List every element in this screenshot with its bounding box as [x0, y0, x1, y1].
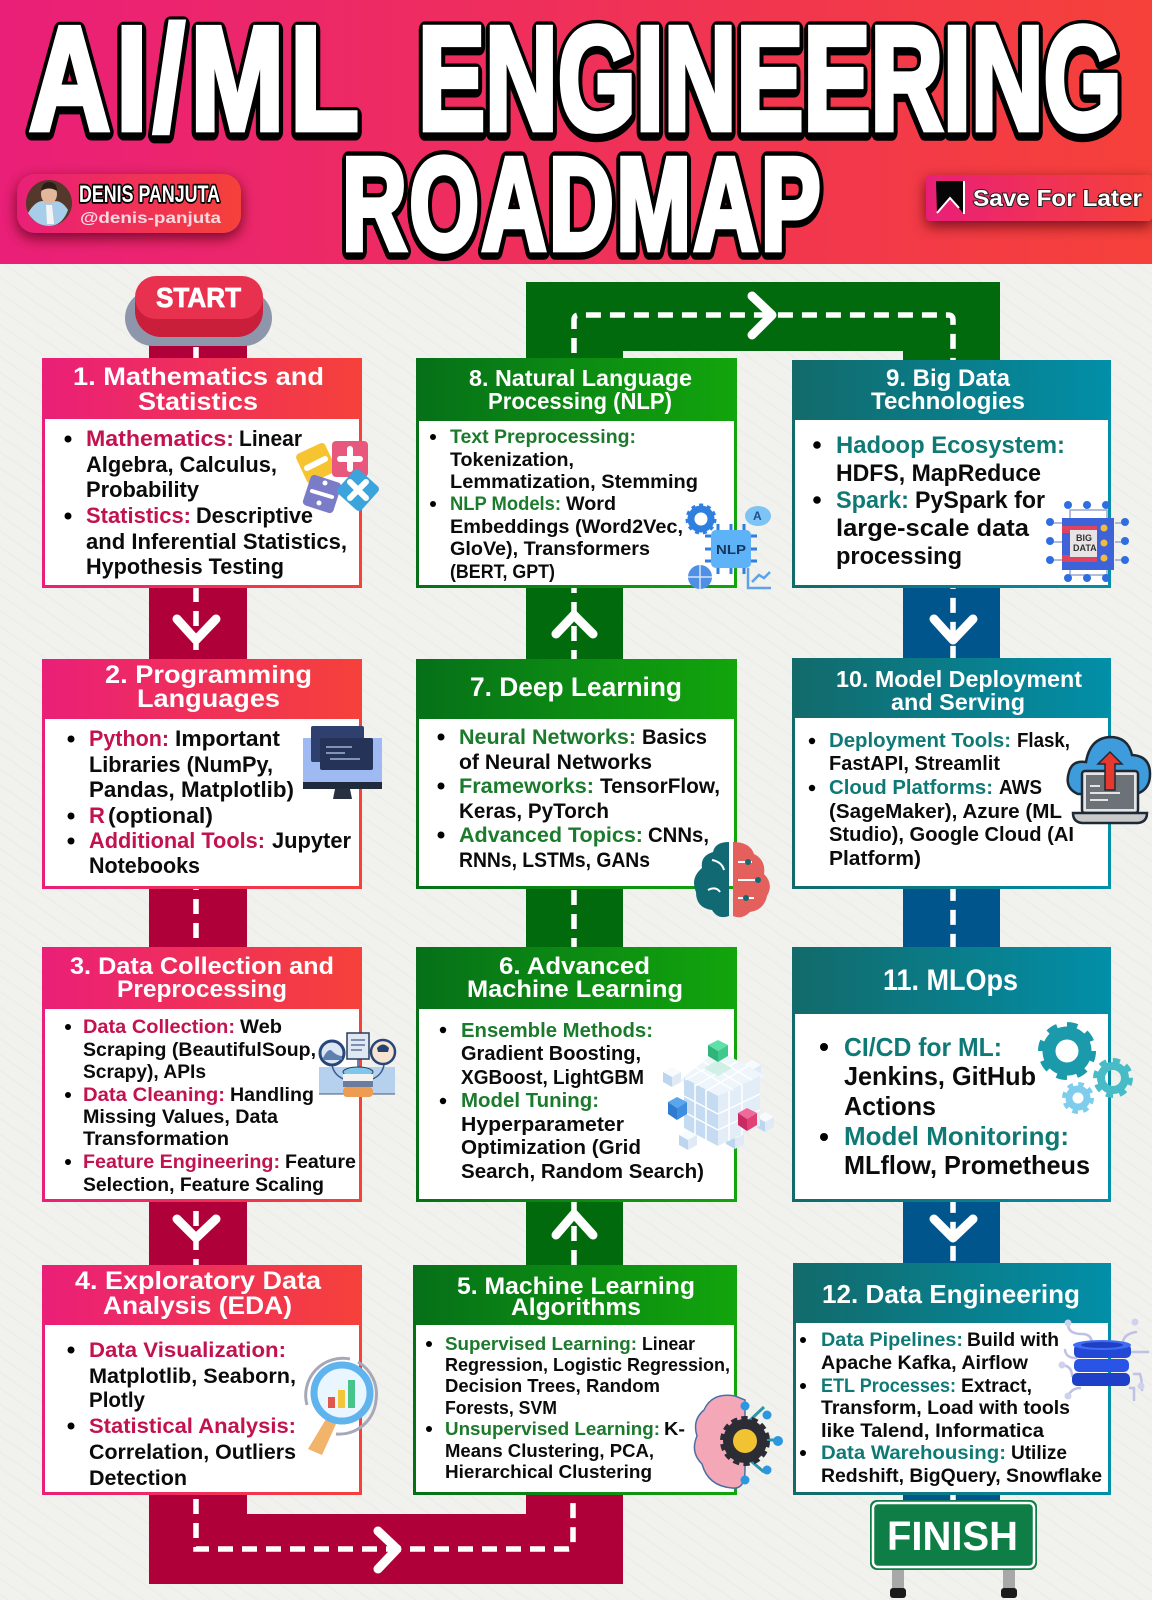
panel: 4 exploratory data analysis	[42, 1265, 376, 1495]
panel: 9 big data technologies	[792, 360, 1129, 588]
title: AI/ML	[29, 0, 359, 164]
heading: 9. Big Data	[886, 365, 1011, 392]
panel: 7 deep learning	[416, 659, 770, 917]
text block: Transformation	[83, 1128, 229, 1150]
text block: NLP Models:	[450, 493, 561, 515]
heading	[75, 1267, 322, 1320]
text block: Statistics:	[86, 503, 191, 528]
heading: 5. Machine Learning	[457, 1273, 695, 1300]
title: ENGINEERING	[418, 0, 1122, 164]
heading	[105, 661, 312, 713]
text block: Keras, PyTorch	[459, 799, 609, 823]
text block: Scraping (BeautifulSoup,	[83, 1039, 316, 1061]
text block: Regression, Logistic Regression,	[445, 1354, 730, 1375]
icon: big data chip: DATA	[1073, 543, 1097, 553]
text block: Neural Networks:	[459, 725, 636, 749]
text block: Descriptive	[196, 503, 313, 528]
heading: Analysis (EDA)	[103, 1292, 292, 1320]
finish sign	[870, 1500, 1037, 1598]
text block: Cloud Platforms:	[829, 776, 993, 799]
text block: Forests, SVM	[445, 1397, 557, 1418]
icon: magnifier chart	[306, 1358, 376, 1455]
heading	[70, 953, 334, 1003]
text block: Supervised Learning:	[445, 1333, 637, 1354]
heading	[469, 365, 692, 414]
text block: Scrapy), APIs	[83, 1061, 206, 1083]
text block: Gradient Boosting,	[461, 1042, 641, 1065]
text block: Linear	[642, 1333, 695, 1354]
text block: Selection, Feature Scaling	[83, 1174, 324, 1196]
text block: Actions	[844, 1091, 936, 1121]
text block: Unsupervised Learning:	[445, 1418, 660, 1439]
text block: Handling	[230, 1084, 314, 1106]
text block: Statistical Analysis:	[89, 1414, 296, 1438]
text block: Search, Random Search)	[461, 1160, 704, 1183]
text block: Linear	[239, 426, 302, 451]
text block: Ensemble Methods:	[461, 1019, 653, 1042]
text block: HDFS, MapReduce	[836, 460, 1041, 487]
icon: author avatar	[26, 180, 72, 226]
heading: 10. Model Deployment	[836, 666, 1082, 692]
text block: Web	[240, 1016, 282, 1038]
text block: Additional Tools:	[89, 828, 265, 853]
text block: XGBoost, LightGBM	[461, 1066, 644, 1089]
text block: Feature	[285, 1151, 356, 1173]
text block: Pandas, Matplotlib)	[89, 777, 294, 802]
heading: 2. Programming	[105, 661, 312, 689]
text block: GloVe), Transformers	[450, 538, 650, 560]
text block: Decision Trees, Random	[445, 1375, 660, 1396]
arrows	[177, 296, 973, 1569]
panel: 3 data collection and preprocessing	[42, 947, 395, 1202]
text block: ETL Processes:	[821, 1375, 956, 1397]
text block: Important	[175, 726, 281, 751]
heading: 12. Data Engineering	[822, 1279, 1080, 1309]
text block: and Inferential Statistics,	[86, 529, 347, 554]
panel: 11 mlops	[792, 947, 1130, 1202]
heading: Processing (NLP)	[488, 388, 672, 414]
text block: Data Visualization:	[89, 1338, 286, 1362]
panel: 12 data engineering	[793, 1263, 1148, 1495]
text block: like Talend, Informatica	[821, 1420, 1044, 1442]
text block: Build with	[967, 1329, 1059, 1351]
finish label: FINISH	[887, 1513, 1018, 1559]
heading	[467, 953, 683, 1003]
icon: brain	[694, 842, 770, 917]
icon: gears	[1042, 1026, 1130, 1112]
text block	[800, 1329, 1102, 1487]
text block	[430, 426, 698, 583]
road dashes	[196, 315, 953, 1549]
heading: Preprocessing	[117, 976, 287, 1003]
text block: processing	[836, 543, 962, 570]
heading	[73, 363, 324, 416]
heading: 1. Mathematics and	[73, 363, 324, 391]
text block: FastAPI, Streamlit	[829, 752, 1000, 775]
icon: data sources	[319, 1033, 395, 1097]
text block: TensorFlow,	[600, 774, 720, 798]
title: ROADMAP	[342, 130, 821, 278]
text block: Studio), Google Cloud (AI	[829, 823, 1074, 846]
text block: Extract,	[961, 1375, 1032, 1397]
text block: Feature Engineering:	[83, 1151, 280, 1173]
text block: Data Pipelines:	[821, 1329, 963, 1351]
heading: Algorithms	[511, 1294, 641, 1321]
text block: Model Monitoring:	[844, 1121, 1069, 1151]
icon: math tiles	[295, 441, 381, 514]
text block: large-scale data	[836, 515, 1029, 542]
heading	[836, 666, 1082, 715]
icon: bookmark	[936, 181, 964, 214]
text block	[813, 432, 1065, 570]
icon: big data chip: BIG	[1076, 533, 1092, 543]
heading: 6. Advanced	[499, 953, 650, 980]
heading: Statistics	[138, 388, 258, 416]
icon: big data chip	[1046, 501, 1129, 582]
text block: Flask,	[1017, 729, 1070, 752]
title: AI/ML	[29, 0, 359, 161]
author name: DENIS PANJUTA	[79, 181, 220, 208]
heading: and Serving	[891, 689, 1025, 715]
icon: code monitor	[303, 726, 382, 799]
text block: Basics	[642, 725, 707, 749]
text block: Redshift, BigQuery, Snowflake	[821, 1465, 1102, 1487]
text block: Embeddings (Word2Vec,	[450, 516, 683, 538]
text block: Probability	[86, 477, 200, 502]
text block: Frameworks:	[459, 774, 594, 798]
heading: 3. Data Collection and	[70, 953, 334, 980]
author badge	[17, 174, 241, 233]
text block: Matplotlib, Seaborn,	[89, 1364, 296, 1388]
text block: Jupyter	[272, 828, 351, 853]
text block: PySpark for	[915, 487, 1045, 514]
text block: Hyperparameter	[461, 1113, 624, 1136]
heading: 4. Exploratory Data	[75, 1267, 322, 1295]
text block: RNNs, LSTMs, GANs	[459, 848, 650, 872]
icon: cloud upload laptop	[1068, 737, 1150, 823]
text block: Jenkins, GitHub	[844, 1061, 1036, 1091]
text block	[820, 1032, 1090, 1180]
heading: 11. MLOps	[883, 964, 1018, 997]
text block: Lemmatization, Stemming	[450, 471, 698, 493]
text block: Spark:	[836, 487, 909, 514]
text block: CI/CD for ML:	[844, 1032, 1002, 1062]
icon: NLP chip: A	[753, 509, 762, 523]
panel: 2 programming languages	[42, 659, 382, 889]
text block: Hierarchical Clustering	[445, 1461, 652, 1482]
text block	[64, 426, 347, 579]
icon: database stack	[1058, 1318, 1148, 1400]
text block: Notebooks	[89, 853, 200, 878]
heading: Machine Learning	[467, 976, 683, 1003]
text block: Data Cleaning:	[83, 1084, 225, 1106]
text block: Algebra, Calculus,	[86, 452, 277, 477]
text block: Plotly	[89, 1388, 145, 1412]
panel: 10 model deployment and serving	[792, 658, 1150, 889]
text block	[65, 1016, 356, 1196]
text block: Model Tuning:	[461, 1089, 599, 1112]
start button	[125, 276, 272, 346]
text block: of Neural Networks	[459, 750, 652, 774]
text block: AWS	[999, 776, 1042, 799]
text block	[440, 1019, 704, 1183]
text block: MLflow, Prometheus	[844, 1150, 1090, 1180]
text block: (optional)	[108, 803, 213, 828]
heading: 7. Deep Learning	[470, 672, 682, 702]
text block: Optimization (Grid	[461, 1136, 641, 1159]
text block: Word	[566, 493, 616, 515]
panel: 6 advanced machine learning	[416, 947, 774, 1202]
icon: NLP chip: NLP	[716, 543, 746, 557]
text block: Tokenization,	[450, 449, 574, 471]
text block: Mathematics:	[86, 426, 234, 451]
icon: NLP chip	[687, 505, 771, 589]
start label: START	[156, 282, 241, 313]
text block: CNNs,	[648, 823, 709, 847]
heading	[871, 365, 1025, 415]
panel: 8 natural language processing	[416, 358, 771, 589]
heading: Technologies	[871, 388, 1025, 415]
text block	[68, 726, 351, 878]
title: ROADMAP	[342, 132, 821, 279]
text block	[438, 725, 720, 872]
save for later badge	[926, 175, 1152, 221]
text block: (BERT, GPT)	[450, 561, 555, 583]
text block: Advanced Topics:	[459, 823, 643, 847]
heading: Languages	[137, 685, 280, 713]
text block: (SageMaker), Azure (ML	[829, 800, 1062, 823]
text block: Means Clustering, PCA,	[445, 1440, 654, 1461]
text block: Correlation, Outliers	[89, 1440, 296, 1464]
text block: Data Warehousing:	[821, 1442, 1006, 1464]
title	[29, 0, 1122, 279]
author handle: @denis-panjuta	[80, 210, 221, 227]
text block: Apache Kafka, Airflow	[821, 1352, 1029, 1374]
text block	[426, 1333, 730, 1482]
heading	[457, 1273, 695, 1321]
text block: Utilize	[1011, 1442, 1067, 1464]
icon: brain with code gear	[694, 1395, 783, 1488]
text block: Transform, Load with tools	[821, 1397, 1070, 1419]
save label: Save For Later	[973, 185, 1142, 211]
text block: Hadoop Ecosystem:	[836, 432, 1065, 459]
text block	[809, 729, 1074, 870]
text block: R	[89, 803, 105, 828]
road: right blue path	[903, 585, 1000, 1503]
text block: Text Preprocessing:	[450, 426, 636, 448]
text block: Libraries (NumPy,	[89, 752, 273, 777]
text block: Detection	[89, 1466, 187, 1490]
text block: Python:	[89, 726, 169, 751]
text block: K-	[664, 1418, 685, 1439]
text block: Data Collection:	[83, 1016, 235, 1038]
text block: Deployment Tools:	[829, 729, 1011, 752]
road: middle green path	[526, 282, 1000, 1267]
text block: Platform)	[829, 847, 921, 870]
panel: 5 machine learning algorithms	[413, 1265, 783, 1495]
text block: Missing Values, Data	[83, 1106, 278, 1128]
header banner	[0, 0, 1152, 279]
panel: 1 mathematics and statistics	[42, 358, 381, 588]
icon: data cube	[663, 1040, 774, 1150]
road: left crimson path	[149, 345, 623, 1584]
text block	[68, 1338, 296, 1490]
heading: 8. Natural Language	[469, 365, 692, 391]
text block: Hypothesis Testing	[86, 554, 284, 579]
